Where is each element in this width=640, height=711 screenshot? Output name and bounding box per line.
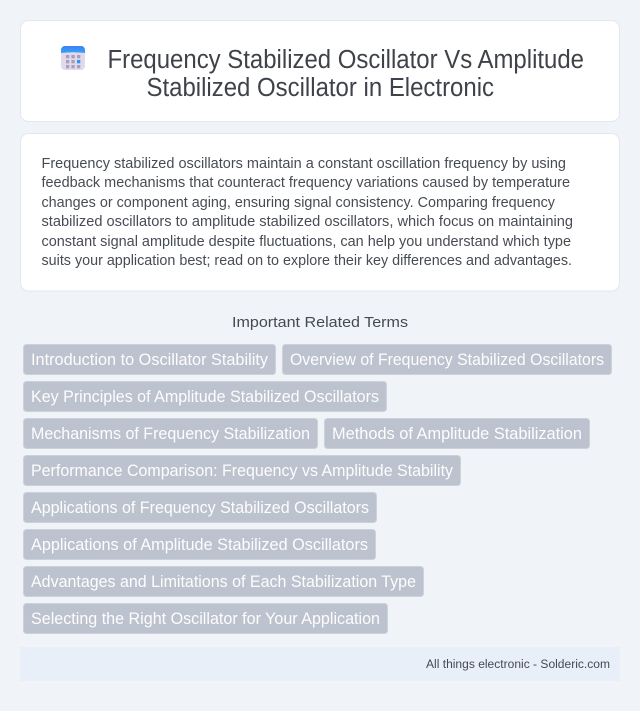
footer: All things electronic - Solderic.com: [426, 657, 610, 671]
tag: [24, 492, 376, 522]
heading: Stabilized Oscillator in Electronic: [146, 74, 494, 102]
text block: description: feedback mechanisms that counteract frequency variations caused by temperature: [42, 175, 570, 191]
tag: [24, 456, 460, 486]
tag: Advantages and Limitations of Each Stabilization Type: [31, 573, 416, 591]
text block: description: stabilized oscillators to amplitude stabilized oscillators, which focus on maintaining: [42, 214, 573, 230]
tag: [24, 566, 424, 596]
tag: Applications of Frequency Stabilized Oscillators: [31, 499, 369, 517]
text block: description: [42, 156, 573, 269]
tag: [24, 604, 388, 634]
footer: [20, 647, 620, 681]
text block: description: suits your application best; read on to explore their key differences and advantages.: [42, 253, 572, 269]
panel: title card: [20, 20, 620, 122]
tag: Applications of Amplitude Stabilized Oscillators: [31, 536, 368, 554]
tag: [324, 418, 590, 448]
tag: Mechanisms of Frequency Stabilization: [31, 425, 310, 443]
tag: [282, 344, 612, 374]
text block: description: changes or component aging, ensuring signal consistency. Comparing frequency: [42, 195, 556, 211]
tag: Selecting the Right Oscillator for Your Application: [31, 610, 380, 628]
tag: [24, 530, 376, 560]
panel: related term tags: [24, 344, 612, 634]
panel: description: [20, 134, 620, 291]
heading: Frequency Stabilized Oscillator Vs Amplitude: [108, 46, 584, 74]
heading: important related terms: Important Related Terms: [232, 314, 408, 331]
tag: [24, 344, 276, 374]
tag: Key Principles of Amplitude Stabilized Oscillators: [31, 388, 379, 406]
tag: Methods of Amplitude Stabilization: [332, 425, 582, 443]
heading: [108, 46, 584, 102]
text block: description: constant signal amplitude despite fluctuations, can help you understand which type: [42, 234, 571, 250]
tag: Performance Comparison: Frequency vs Amplitude Stability: [31, 462, 454, 480]
tag: [24, 418, 318, 448]
text block: description: Frequency stabilized oscillators maintain a constant oscillation frequency by using: [42, 156, 566, 172]
tag: Introduction to Oscillator Stability: [31, 351, 269, 369]
icon: calendar: [61, 46, 85, 70]
tag: Overview of Frequency Stabilized Oscillators: [290, 351, 604, 369]
tag: [24, 382, 386, 412]
